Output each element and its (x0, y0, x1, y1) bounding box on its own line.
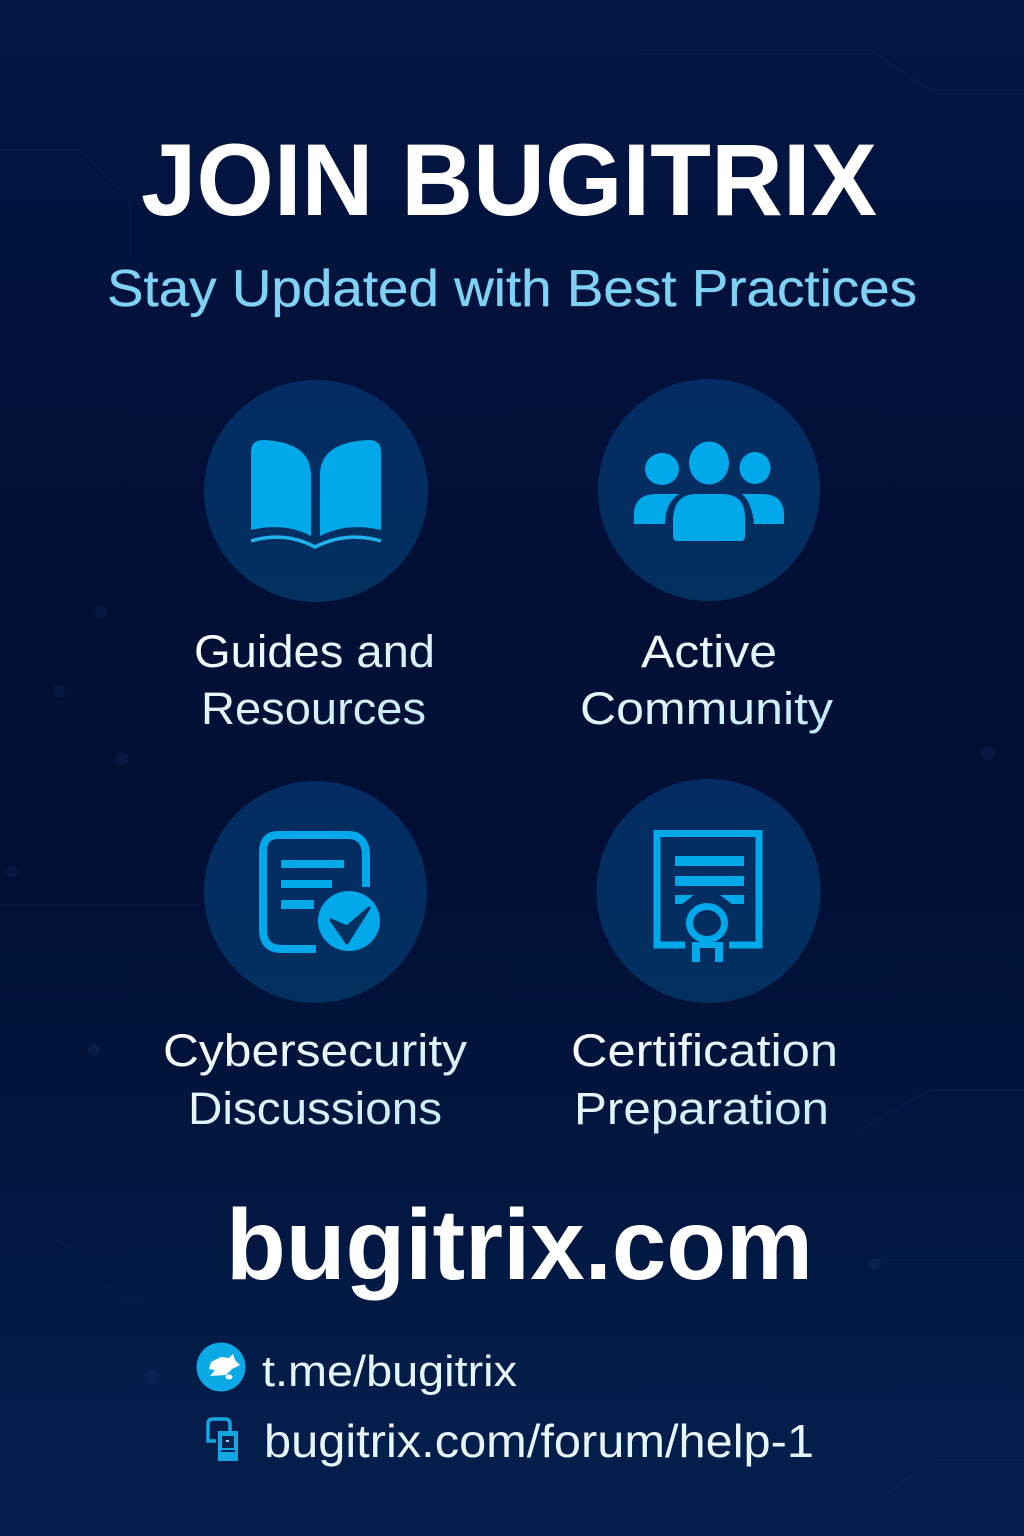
website url: bugitrix.com (226, 1189, 813, 1301)
label: Resources (201, 683, 426, 734)
subtitle: Stay Updated with Best Practices (107, 260, 917, 318)
label: Certification (571, 1025, 838, 1076)
feature: cybersecurity discussions (163, 781, 480, 1134)
icon: padlock (208, 1419, 238, 1461)
forum text: bugitrix.com/forum/help-1 (264, 1415, 814, 1467)
label: Cybersecurity (163, 1025, 468, 1076)
label: Preparation (574, 1083, 829, 1134)
telegram link (196, 1342, 517, 1396)
icon: certificate (596, 779, 820, 1003)
feature: active community (580, 379, 834, 734)
title: JOIN BUGITRIX (141, 123, 877, 237)
telegram text: t.me/bugitrix (262, 1347, 517, 1396)
label: Community (580, 683, 834, 734)
forum link (208, 1415, 814, 1467)
label: Guides and (194, 626, 435, 677)
icon: people group (598, 379, 820, 601)
label: Discussions (188, 1083, 442, 1134)
feature: guides and resources (194, 380, 448, 734)
icon: telegram badge (196, 1342, 246, 1392)
label: Active (641, 626, 777, 677)
icon: document with check (204, 781, 427, 1003)
icon: open book (204, 380, 428, 602)
feature: certification preparation (571, 779, 851, 1134)
